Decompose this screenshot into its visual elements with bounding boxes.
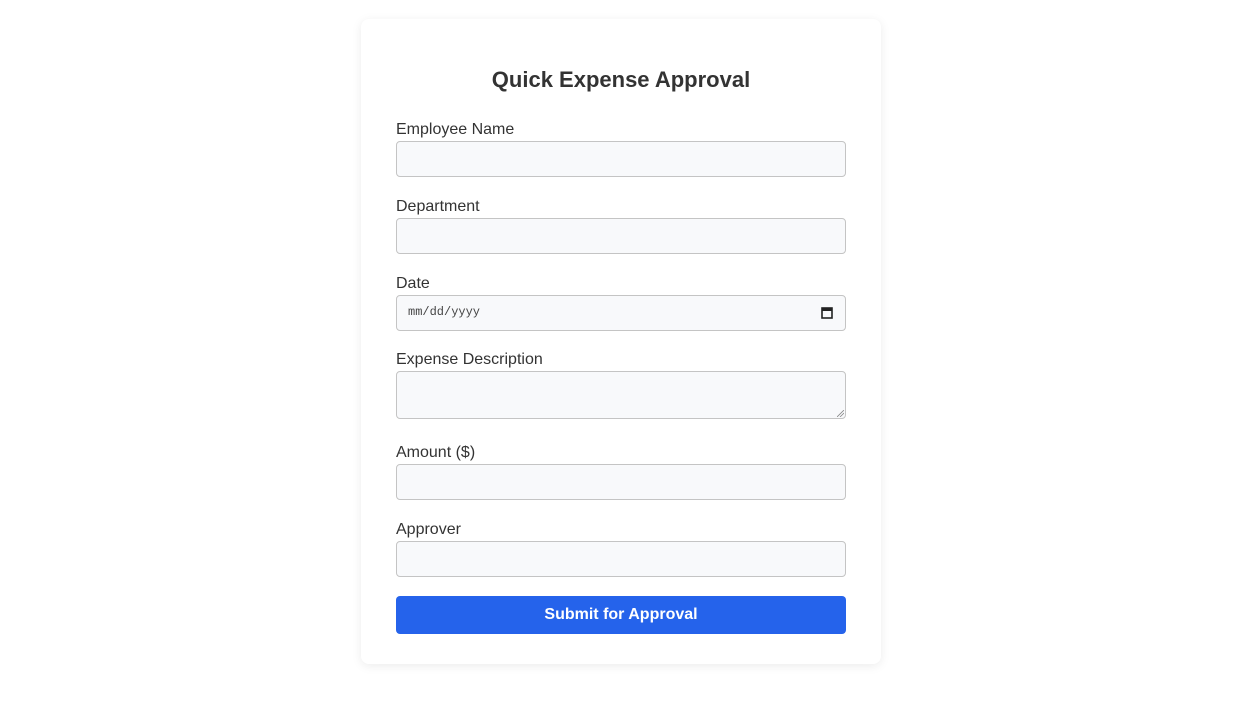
textarea: expense description [396,371,846,419]
label: amount: Amount ($) [396,444,475,461]
form card [361,19,881,664]
input: approver [396,541,846,577]
label: approver: Approver [396,521,461,538]
title: Quick Expense Approval [492,67,750,92]
submit button [396,596,846,634]
label: date: Date [396,275,430,292]
input: department [396,218,846,254]
input: amount [396,464,846,500]
label: employee name: Employee Name [396,121,514,138]
input: date: mm/dd/yyyy [408,305,480,319]
input: date [396,295,846,331]
submit button: Submit for Approval [544,606,698,623]
label: department: Department [396,198,480,215]
input: employee name [396,141,846,177]
label: expense description: Expense Description [396,351,543,368]
